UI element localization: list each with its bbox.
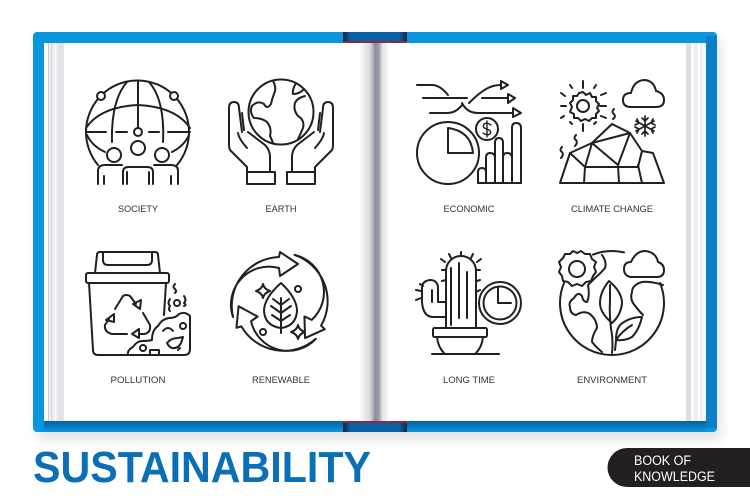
label: society: SOCIETY <box>118 204 159 215</box>
label: long time: LONG TIME <box>443 375 495 386</box>
right page <box>375 43 706 421</box>
badge: book of knowledge: BOOK OF <box>634 453 691 468</box>
label: earth: EARTH <box>266 204 297 215</box>
right page edges <box>686 43 706 421</box>
book <box>33 32 721 440</box>
icon: environment <box>559 251 664 355</box>
icon: economic <box>417 81 521 184</box>
icon: long time <box>416 252 521 354</box>
icon: society <box>86 80 190 184</box>
icon: pollution <box>86 252 190 355</box>
title: SUSTAINABILITY <box>33 443 371 492</box>
icon: renewable <box>228 252 351 371</box>
label: environment: ENVIRONMENT <box>577 375 647 386</box>
label: economic: ECONOMIC <box>444 204 495 215</box>
spine top <box>343 32 407 43</box>
badge: book of knowledge <box>608 448 750 487</box>
badge: book of knowledge: KNOWLEDGE <box>634 469 715 484</box>
icon: climate change <box>560 80 664 183</box>
icon: earth in hands <box>229 80 333 184</box>
left page <box>44 43 375 421</box>
label: pollution: POLLUTION <box>110 375 166 386</box>
label: climate change: CLIMATE CHANGE <box>571 204 653 215</box>
left page edges <box>48 43 64 421</box>
label: renewable: RENEWABLE <box>252 375 310 386</box>
spine bottom <box>343 421 407 432</box>
book cover <box>33 32 717 432</box>
